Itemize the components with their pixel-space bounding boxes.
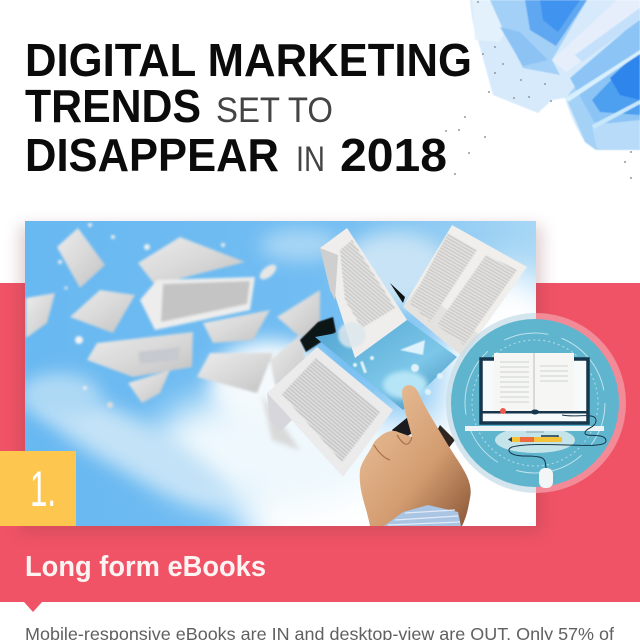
shirt sleeve (384, 505, 461, 526)
clouds (25, 221, 536, 526)
title: IN (296, 140, 325, 179)
decorative rings (465, 333, 605, 473)
mouse cable (509, 415, 606, 468)
number one: 1. (30, 461, 56, 517)
hand (360, 385, 471, 526)
title: TRENDS (25, 80, 201, 132)
lower left page (267, 347, 393, 477)
sky background (25, 221, 536, 526)
flying pages (26, 223, 320, 408)
photo shadow (20, 226, 542, 532)
tablet screen (315, 320, 457, 410)
lower ghost page (262, 395, 300, 450)
laptop base (465, 426, 604, 431)
title: 2018 (340, 129, 447, 181)
upper curled page (320, 228, 407, 358)
red section band (0, 283, 640, 602)
photo: flying books and tablet (25, 221, 536, 526)
decorative fan graphic (470, 0, 640, 150)
title: DIGITAL MARKETING (25, 34, 472, 86)
mouse (539, 468, 553, 488)
book pages and tablet (262, 225, 527, 526)
laptop screen (481, 359, 588, 423)
right book page (403, 225, 527, 357)
pen (508, 436, 562, 442)
tablet black grip (300, 317, 336, 352)
circular laptop icon (446, 313, 626, 493)
yellow number badge (0, 451, 76, 526)
title: SET TO (216, 91, 333, 130)
scattered dots (445, 1, 632, 179)
title: DISAPPEAR (25, 129, 279, 181)
title (25, 34, 472, 181)
heading pointer (24, 602, 42, 612)
section heading: Long form eBooks (25, 551, 266, 583)
